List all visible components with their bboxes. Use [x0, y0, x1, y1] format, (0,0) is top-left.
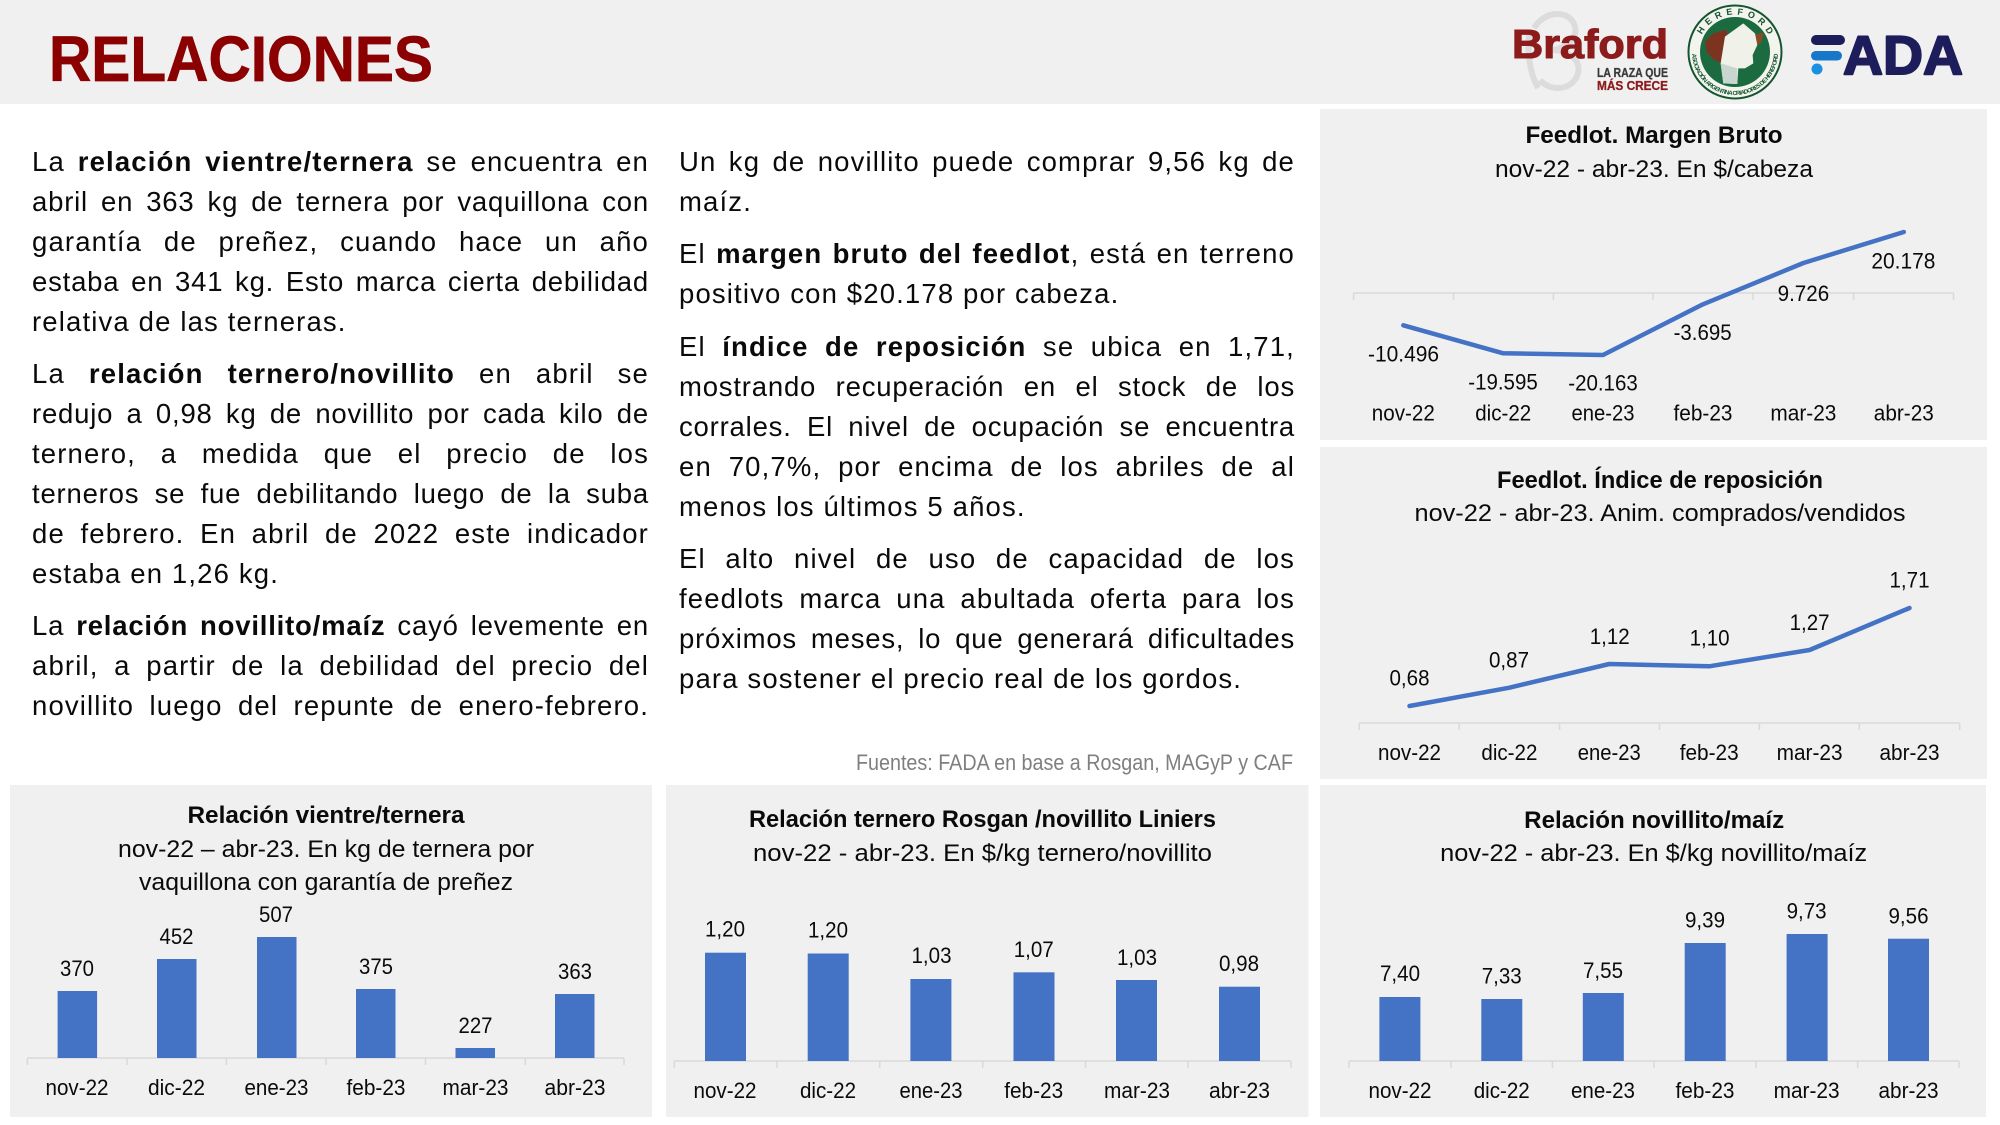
category labels: mar-23 [1770, 401, 1836, 426]
category labels: feb-23 [1674, 401, 1732, 426]
value labels: 0,87 [1489, 648, 1529, 673]
heading: Relación ternero Rosgan /novillito Liniers [749, 806, 1216, 833]
text block: capacidad de los feedlots: feedlots marca una abultada oferta para los [679, 583, 1295, 614]
value labels: 9,56 [1888, 903, 1928, 928]
category labels [1372, 401, 1934, 426]
value labels: 0,98 [1219, 951, 1259, 976]
value labels: 1,27 [1790, 610, 1830, 635]
logo: Braford: LA RAZA QUE [1597, 66, 1668, 80]
heading: Feedlot. Margen Bruto [1526, 122, 1782, 149]
axis [1354, 293, 1954, 300]
title: RELACIONES [49, 23, 433, 95]
value labels: 375 [359, 954, 393, 979]
text block: capacidad de los feedlots [679, 543, 1295, 694]
category labels [1368, 1078, 1938, 1103]
value labels: 20.178 [1871, 249, 1935, 274]
value labels: 9,73 [1787, 899, 1827, 924]
value labels [60, 902, 592, 1038]
value labels: 9,39 [1685, 908, 1725, 933]
text block: kg de maíz [679, 146, 1295, 217]
text block: relación vientre/ternera: abril en 363 kg de ternera por vaquillona con [32, 186, 649, 217]
text block: margen bruto: El margen bruto del feedlot, está en terreno [679, 238, 1295, 269]
axis [1349, 1061, 1959, 1068]
text block: margen bruto [679, 238, 1295, 309]
text block: índice de reposición [679, 331, 1295, 522]
value labels: 1,03 [1117, 945, 1157, 970]
value labels: 507 [259, 902, 293, 927]
category labels: nov-22 [694, 1078, 756, 1103]
subheading: nov-22 – abr-23. En kg de ternera por [118, 836, 534, 863]
text block: capacidad de los feedlots: El alto nivel de uso de capacidad de los [679, 543, 1295, 574]
subheading: nov-22 - abr-23. En $/cabeza [1495, 156, 1814, 183]
heading: Relación vientre/ternera [188, 802, 465, 829]
bars [705, 953, 1260, 1061]
category labels: mar-23 [1104, 1078, 1170, 1103]
panel: Relacion ternero/novillito [666, 785, 1308, 1117]
text block: índice de reposición: mostrando recuperación en el stock de los [679, 371, 1295, 402]
text block: capacidad de los feedlots: próximos meses, lo que generará dificultades [679, 623, 1295, 654]
subheading: vaquillona con garantía de preñez [139, 869, 513, 896]
text block: índice de reposición: menos los últimos 5 años. [679, 491, 1026, 522]
category labels: mar-23 [1774, 1078, 1840, 1103]
subheading: nov-22 - abr-23. En $/kg ternero/novillito [753, 840, 1212, 867]
logo: Hereford: HEREFORD [1696, 8, 1773, 34]
value labels: -19.595 [1468, 370, 1538, 394]
category labels: ene-23 [1571, 1078, 1635, 1103]
category labels: abr-23 [544, 1075, 606, 1100]
category labels: dic-22 [1474, 1078, 1530, 1103]
text block: índice de reposición: corrales. El nivel de ocupación se encuentra [679, 411, 1295, 442]
value labels [1368, 249, 1935, 396]
panel: Relacion novillito/maiz [1320, 785, 1986, 1117]
value labels: 1,07 [1014, 937, 1054, 962]
text block: índice de reposición: en 70,7%, por encima de los abriles de al [679, 451, 1295, 482]
category labels: feb-23 [1680, 740, 1739, 765]
category labels: mar-23 [1777, 740, 1843, 765]
value labels: -20.163 [1568, 371, 1638, 396]
category labels: dic-22 [148, 1075, 205, 1100]
text block: relación novillito/maíz: novillito luego del repunte de enero-febrero. [32, 690, 649, 721]
value labels: -10.496 [1368, 342, 1439, 367]
category labels: nov-22 [1378, 740, 1441, 765]
category labels [46, 1075, 606, 1100]
value labels: 7,33 [1482, 964, 1522, 989]
category labels [1378, 740, 1940, 765]
text block: relación ternero/novillito: de febrero. En abril de 2022 este indicador [32, 518, 649, 549]
category labels: nov-22 [1368, 1078, 1432, 1103]
category labels: feb-23 [346, 1075, 406, 1100]
value labels: 1,03 [912, 943, 952, 968]
text block: relación vientre/ternera: estaba en 341 kg. Esto marca cierta debilidad [32, 266, 649, 297]
subheading: nov-22 - abr-23. Anim. comprados/vendidos [1414, 500, 1906, 527]
text block: relación ternero/novillito: terneros se fue debilitando luego de la suba [32, 478, 649, 509]
panel: Feedlot margen bruto [1320, 109, 1987, 440]
subheading: nov-22 - abr-23. En $/kg novillito/maíz [1440, 840, 1867, 867]
text block: relación vientre/ternera [32, 146, 649, 337]
source note: Fuentes: FADA en base a Rosgan, MAGyP y CAF [856, 750, 1293, 775]
text block: relación ternero/novillito: redujo a 0,98 kg de novillito por cada kilo de [32, 398, 649, 429]
category labels: dic-22 [800, 1078, 856, 1103]
text block: kg de maíz: maíz. [679, 186, 752, 217]
logo: FADA: ADA [1843, 24, 1963, 86]
category labels: abr-23 [1880, 740, 1940, 765]
value labels: 1,20 [808, 918, 848, 943]
text block: kg de maíz: Un kg de novillito puede comprar 9,56 kg de [679, 146, 1295, 177]
text block: capacidad de los feedlots: para sostener el precio real de los gordos. [679, 663, 1242, 694]
text block: margen bruto: positivo con $20.178 por cabeza. [679, 278, 1119, 309]
category labels: ene-23 [900, 1078, 962, 1103]
category labels: ene-23 [1578, 740, 1641, 765]
bars [1379, 934, 1929, 1061]
category labels: abr-23 [1209, 1078, 1270, 1103]
logo: Braford: Braford [1512, 21, 1668, 67]
logo: Hereford [1688, 4, 1782, 100]
logo: Braford: MÁS CRECE [1597, 78, 1668, 93]
value labels: 1,10 [1690, 626, 1730, 651]
category labels: feb-23 [1676, 1078, 1734, 1103]
line series [1403, 232, 1904, 355]
axis [27, 1058, 624, 1065]
text block: relación novillito/maíz: abril, a partir de la debilidad del precio del [32, 650, 649, 681]
category labels: nov-22 [1372, 401, 1435, 426]
value labels: -3.695 [1674, 320, 1732, 345]
text block: índice de reposición: El índice de reposición se ubica en 1,71, [679, 331, 1295, 362]
text block: relación novillito/maíz: La relación novillito/maíz cayó levemente en [32, 610, 649, 641]
text block: relación vientre/ternera: garantía de preñez, cuando hace un año [32, 226, 649, 257]
value labels: 452 [160, 924, 194, 949]
category labels: feb-23 [1004, 1078, 1063, 1103]
category labels: mar-23 [442, 1075, 508, 1100]
subheading [118, 836, 534, 896]
value labels: 1,12 [1590, 624, 1630, 649]
value labels [705, 917, 1259, 976]
value labels: 7,55 [1583, 958, 1623, 983]
text block: relación ternero/novillito: ternero, a medida que el precio de los [32, 438, 649, 469]
logo: Braford [1512, 14, 1668, 93]
value labels: 363 [558, 959, 592, 984]
text block: relación vientre/ternera: relativa de las terneras. [32, 306, 347, 337]
category labels: abr-23 [1878, 1078, 1938, 1103]
value labels: 1,20 [705, 917, 745, 942]
value labels [1380, 899, 1928, 989]
axis [674, 1061, 1291, 1068]
category labels: ene-23 [1572, 401, 1634, 426]
category labels: nov-22 [46, 1075, 108, 1100]
value labels: 1,71 [1890, 568, 1930, 593]
category labels: dic-22 [1481, 740, 1537, 765]
text block: relación ternero/novillito: estaba en 1,26 kg. [32, 558, 279, 589]
bars [58, 937, 595, 1058]
axis [1359, 723, 1960, 730]
category labels: abr-23 [1874, 401, 1934, 426]
heading: Feedlot. Índice de reposición [1497, 466, 1823, 494]
value labels: 9.726 [1778, 281, 1829, 306]
header band [0, 0, 2000, 104]
value labels: 7,40 [1380, 961, 1420, 986]
text block: relación vientre/ternera: La relación vientre/ternera se encuentra en [32, 146, 649, 177]
heading: Relación novillito/maíz [1524, 807, 1784, 834]
category labels [694, 1078, 1270, 1103]
text block: relación novillito/maíz [32, 610, 649, 721]
category labels: dic-22 [1475, 401, 1531, 426]
line series [1410, 608, 1910, 706]
text block: relación ternero/novillito: La relación ternero/novillito en abril se [32, 358, 649, 389]
category labels: ene-23 [244, 1075, 308, 1100]
value labels: 227 [458, 1013, 492, 1038]
value labels: 0,68 [1390, 666, 1430, 691]
value labels [1390, 568, 1930, 691]
text block: relación ternero/novillito [32, 358, 649, 589]
panel: Relacion vientre/ternera [10, 785, 652, 1117]
panel: Feedlot indice de reposicion [1320, 447, 1987, 779]
value labels: 370 [60, 956, 94, 981]
logo: Hereford: ASOCIACIÓN ARGENTINA CRIADORES DE HEREFORD [1692, 54, 1778, 96]
